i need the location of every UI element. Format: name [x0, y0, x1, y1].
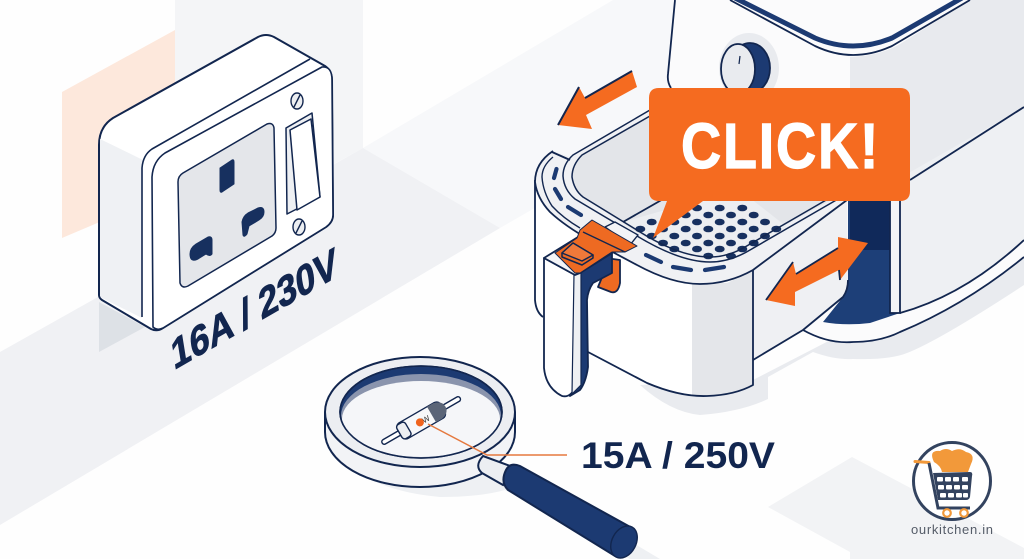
- lens glass: [342, 381, 500, 457]
- cart right wheel: [960, 509, 968, 517]
- handle edge strip: [572, 271, 581, 394]
- neutral pin hole: [242, 208, 264, 236]
- drawer front face: [543, 240, 753, 396]
- bottom screw: [293, 219, 305, 235]
- drawer side wall: [753, 200, 848, 360]
- body front opening: [823, 200, 900, 324]
- air fryer shadow: [640, 240, 1024, 415]
- logo: ourkitchen.in: [911, 442, 993, 537]
- lens recess: [340, 366, 502, 458]
- handle neck: [478, 456, 513, 485]
- lens rim top: [325, 357, 515, 467]
- top screw: [291, 93, 303, 109]
- fuse rating label: 15A / 250V: [581, 435, 775, 476]
- magnifier handle: [503, 465, 636, 557]
- rim inner lines: [563, 110, 845, 262]
- socket rating label: 16A / 230V: [168, 239, 341, 379]
- handle top: [544, 237, 612, 275]
- orange latch tab behind handle: [598, 258, 620, 292]
- body lower edge: [900, 240, 1024, 313]
- socket side face: [100, 139, 143, 318]
- lens rim thickness: [325, 377, 515, 487]
- drawer bottom edge: [588, 270, 753, 396]
- callout text: CLICK!: [681, 110, 878, 182]
- fuse marking: W: [420, 413, 432, 425]
- orange latch button: [555, 220, 637, 273]
- callout shape: [649, 88, 910, 238]
- handle shadow side: [570, 253, 612, 396]
- left flange wall: [535, 151, 580, 317]
- live pin hole: [190, 237, 212, 260]
- basket perforation dots: [635, 205, 781, 259]
- chef hat: [932, 449, 973, 472]
- wall socket with switch: [99, 35, 333, 330]
- earth pin hole: [220, 160, 234, 192]
- handle end cap: [605, 521, 643, 559]
- logo ring: [914, 442, 990, 520]
- basket interior: [572, 115, 860, 256]
- outlet faceplate: [178, 124, 276, 287]
- control knob: [719, 33, 779, 103]
- magnifying glass: [325, 357, 660, 559]
- magnifier shadow: [330, 430, 660, 559]
- body shell: [660, 0, 1024, 342]
- arrow: slide in and out: [766, 237, 868, 306]
- fuse: [378, 390, 465, 451]
- air fryer main body: [660, 0, 1024, 342]
- cart frame: [929, 463, 970, 508]
- body seam line: [910, 107, 1024, 180]
- rim outer line: [535, 151, 847, 284]
- top lid navy band: [735, 0, 962, 46]
- rocker switch: [286, 113, 320, 214]
- socket front plate: [152, 67, 333, 329]
- cart basket: [933, 472, 972, 500]
- basket floor: [623, 198, 787, 257]
- fuse leader line: [428, 424, 567, 455]
- body left edge: [668, 0, 675, 88]
- drawer handle: [544, 237, 612, 396]
- cart grid cells: [937, 477, 968, 498]
- arrow: pull out: [558, 71, 637, 129]
- cart handle: [915, 462, 929, 463]
- socket body: [99, 35, 333, 330]
- logo text: ourkitchen.in: [911, 522, 993, 537]
- air fryer drawer: [535, 110, 860, 396]
- rim slots: [554, 169, 724, 270]
- drawer rim: [535, 110, 860, 284]
- lower grey side: [900, 107, 1024, 313]
- rim latch guard: [605, 222, 638, 245]
- upper grey side: [850, 0, 1024, 210]
- handle front face: [544, 258, 575, 396]
- cart left wheel: [943, 509, 951, 517]
- callout bubble: [649, 88, 910, 238]
